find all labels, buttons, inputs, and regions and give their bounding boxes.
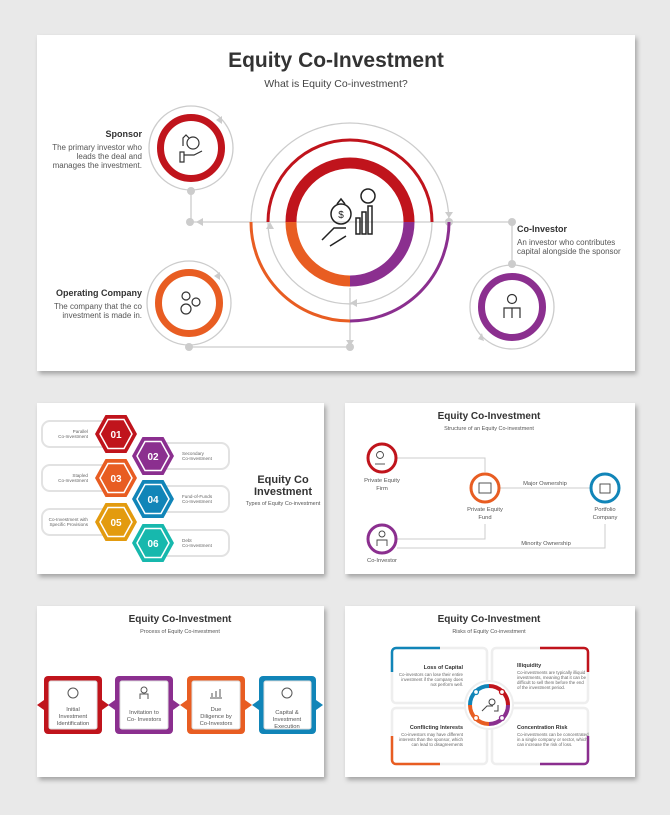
text: sponsor: [52, 129, 143, 170]
hexagons 01-06: 06: [147, 539, 159, 550]
text: co-investor: [517, 224, 621, 256]
labels: Portfolio: [594, 507, 616, 513]
icon: money bag and chart: [322, 189, 375, 246]
panel: risks: [345, 606, 635, 777]
steps: Co- Investors: [127, 717, 161, 723]
text: co-investor: capital alongside the sponsor: [517, 247, 621, 256]
operating company ring: [158, 272, 220, 334]
labels: [364, 478, 618, 564]
text: operating company: The company that the co: [54, 302, 143, 311]
panel: structure: Equity Co-Investment: [438, 411, 541, 422]
text: sponsor: manages the investment.: [53, 161, 142, 170]
text: sponsor: leads the deal and: [77, 152, 142, 161]
steps: Execution: [274, 724, 300, 730]
panel: types of co-investment: Debt: [182, 538, 192, 543]
labels: Company: [593, 515, 618, 521]
panel: risks: Equity Co-Investment: [438, 614, 541, 625]
panel: types of co-investment: [37, 403, 324, 574]
hexagons 01-06: 05: [110, 518, 122, 529]
risk texts: in a single company or sector, which: [517, 737, 588, 742]
labels: Co-Investor: [367, 558, 397, 564]
steps: Capital &: [275, 710, 299, 716]
hexagons 01-06: 04: [147, 495, 159, 506]
panel: main slide: [37, 35, 635, 371]
risk texts: Co-investors can lose their entire: [399, 672, 464, 677]
risk texts: can lead to disagreements: [412, 742, 464, 747]
risk texts: investment if the company does: [401, 677, 464, 682]
risk texts: Conflicting Interests: [410, 725, 463, 731]
steps: Investment: [273, 717, 302, 723]
nodes: [368, 444, 619, 553]
risk texts: Illiquidity: [517, 663, 542, 669]
risk texts: Co-investments can be concentrated: [517, 732, 589, 737]
risk texts: of the investment period.: [517, 685, 565, 690]
icon: hand with money: [180, 135, 202, 162]
text: operating company: [54, 288, 143, 320]
panel: types of co-investment: Fund-of-Funds: [182, 494, 213, 499]
risk texts: can increase the risk of loss.: [517, 742, 572, 747]
labels: Major Ownership: [523, 481, 567, 487]
heading: Equity Co: [257, 474, 309, 486]
panel: types of co-investment: Parallel: [73, 429, 88, 434]
panel: process: [37, 606, 324, 777]
co-investor ring: [482, 276, 542, 338]
heading: Types of Equity Co-investment: [246, 501, 321, 507]
sponsor ring: [160, 118, 222, 178]
risk texts: not perform well.: [431, 682, 463, 687]
panel: types of co-investment: Co-Investment: [182, 543, 213, 548]
risk texts: difficult to sell them before the end: [517, 680, 584, 685]
panel: process: Process of Equity Co-investment: [140, 629, 220, 635]
text: co-investor: An investor who contributes: [517, 238, 615, 247]
connectors: [147, 106, 554, 349]
panel: types of co-investment: Co-Investment: [182, 456, 213, 461]
panel: types of co-investment: Co-Investment: [58, 478, 89, 483]
title: Equity Co-Investment: [228, 49, 444, 72]
panel: structure: [345, 403, 635, 574]
hexagons 01-06: [95, 415, 174, 562]
pills: [42, 421, 229, 556]
steps: Co-Investors: [200, 721, 233, 727]
text: sponsor: Sponsor: [105, 129, 142, 139]
steps: Investment: [59, 714, 88, 720]
risk texts: investments, meaning that it can be: [517, 675, 587, 680]
hexagons 01-06: 01: [110, 430, 122, 441]
heading: [246, 474, 321, 507]
text: operating company: investment is made in.: [62, 311, 142, 320]
icon: investor: [504, 294, 520, 318]
risk texts: Co-investments are typically illiquid: [517, 670, 586, 675]
labels: Private Equity: [467, 507, 503, 513]
panel: types of co-investment: Stapled: [72, 473, 88, 478]
panel: types of co-investment: Co-Investment with: [49, 517, 88, 522]
panel: risks: Risks of Equity Co-investment: [452, 629, 526, 635]
steps: Diligence by: [200, 714, 232, 720]
panel: process: Equity Co-Investment: [129, 614, 232, 625]
icon: people gears: [181, 292, 200, 314]
panel: structure: Structure of an Equity Co-investment: [444, 426, 534, 432]
labels: Fund: [478, 515, 492, 521]
center icon ring: [465, 681, 513, 729]
risk texts: Loss of Capital: [424, 665, 463, 671]
steps: Identification: [57, 721, 89, 727]
labels: Private Equity: [364, 478, 400, 484]
risk texts: [399, 663, 589, 747]
steps: Due: [211, 707, 221, 713]
risk texts: Co-investors may have different: [401, 732, 464, 737]
hexagons 01-06: 03: [110, 474, 122, 485]
panel: types of co-investment: Secondary: [182, 451, 205, 456]
central rings: [251, 140, 449, 321]
panel: types of co-investment: Specific Provisions: [49, 522, 89, 527]
cards: [392, 648, 588, 764]
icon: money bag and chart: $: [338, 210, 344, 221]
text: co-investor: Co-Investor: [517, 224, 568, 234]
risk texts: Concentration Risk: [517, 725, 568, 731]
panel: types of co-investment: Co-Investment: [182, 499, 213, 504]
steps: Invitation to: [129, 710, 159, 716]
heading: Investment: [254, 486, 312, 498]
panel: types of co-investment: Co-Investment: [58, 434, 89, 439]
hexagons 01-06: 02: [147, 452, 159, 463]
steps: [37, 676, 323, 734]
text: operating company: Operating Company: [56, 288, 142, 298]
risk texts: interests than the sponsor, which: [399, 737, 464, 742]
subtitle: What is Equity Co-investment?: [264, 78, 408, 90]
labels: Firm: [376, 486, 388, 492]
text: sponsor: The primary investor who: [52, 143, 143, 152]
connectors: [397, 458, 605, 548]
labels: Minority Ownership: [521, 541, 571, 547]
steps: Initial: [66, 707, 80, 713]
